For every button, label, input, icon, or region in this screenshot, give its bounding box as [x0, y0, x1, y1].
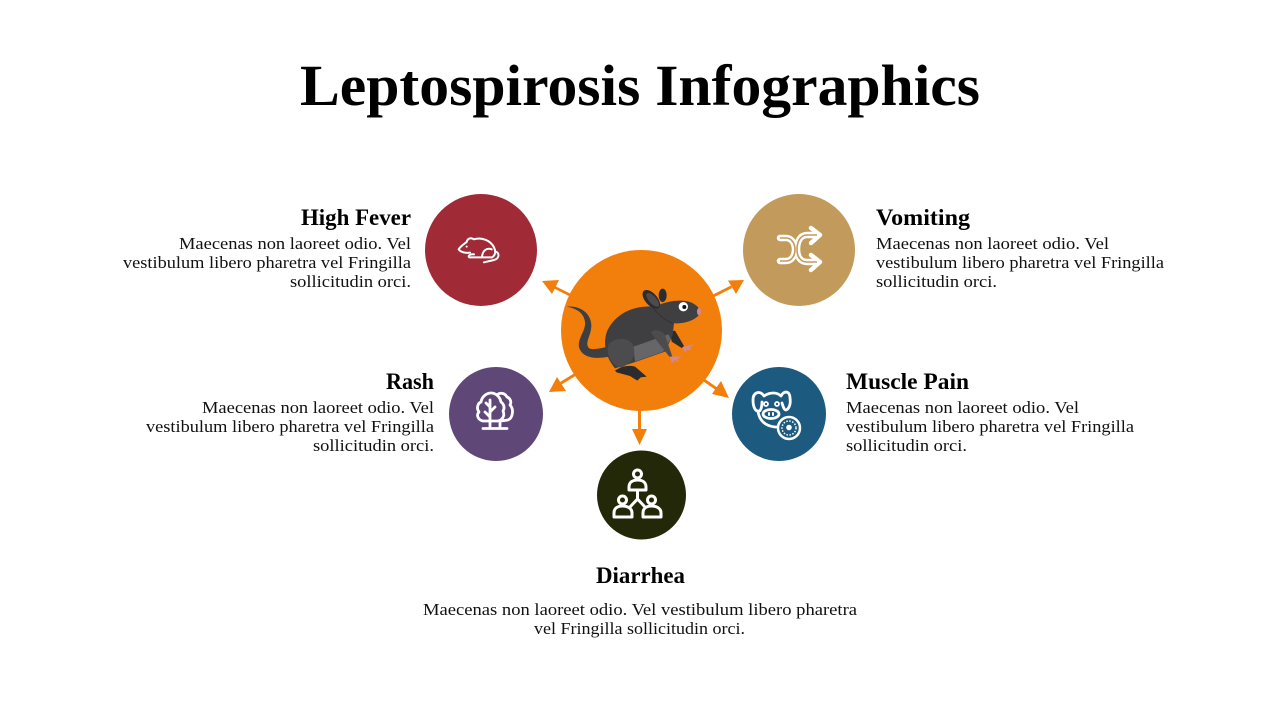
text block: rash — [146, 398, 434, 455]
panel: diarrhea — [423, 450, 857, 638]
text block: vomiting: sollicitudin orci. — [876, 272, 997, 291]
title: Leptospirosis Infographics — [300, 53, 980, 118]
icon: rat illustration — [567, 287, 701, 381]
heading: muscle pain: Muscle Pain — [846, 369, 969, 394]
heading: diarrhea: Diarrhea — [596, 563, 685, 588]
text block: diarrhea — [423, 600, 857, 638]
text block: rash: sollicitudin orci. — [313, 436, 434, 455]
text block: muscle pain — [846, 398, 1134, 455]
icon circle: tan with crossing arrows — [743, 194, 855, 306]
icon circle: dark olive with people network — [597, 450, 686, 540]
text block: vomiting: vestibulum libero pharetra vel Fringilla — [876, 253, 1164, 272]
panel: rash — [146, 367, 543, 461]
arrow: to muscle pain — [704, 379, 729, 398]
icon circle: red with mouse — [425, 194, 537, 306]
panel: high fever — [123, 194, 537, 306]
text block: high fever: vestibulum libero pharetra vel Fringilla — [123, 253, 411, 272]
heading: rash: Rash — [386, 369, 434, 394]
panel: vomiting — [743, 194, 1164, 306]
text block: muscle pain: vestibulum libero pharetra vel Fringilla — [846, 417, 1134, 436]
text block: muscle pain: Maecenas non laoreet odio. Vel — [846, 398, 1079, 417]
text block: high fever: sollicitudin orci. — [290, 272, 411, 291]
icon circle: blue with pig and virus — [732, 367, 826, 461]
panel: muscle pain — [732, 367, 1134, 461]
heading: high fever: High Fever — [301, 205, 411, 230]
arrow: to high fever — [542, 280, 571, 296]
text block: high fever: Maecenas non laoreet odio. Vel — [179, 234, 411, 253]
text block: muscle pain: sollicitudin orci. — [846, 436, 967, 455]
heading: vomiting: Vomiting — [876, 205, 971, 230]
central circle with rat — [561, 250, 722, 411]
text block: vomiting — [876, 234, 1164, 291]
text block: diarrhea: vel Fringilla sollicitudin orci. — [534, 619, 745, 638]
text block: high fever — [123, 234, 411, 291]
arrow: to rash — [549, 374, 576, 392]
icon circle: purple with trees — [449, 367, 543, 461]
text block: vomiting: Maecenas non laoreet odio. Vel — [876, 234, 1109, 253]
arrow: to vomiting — [713, 280, 744, 297]
arrows from the centre to each symptom — [542, 280, 744, 445]
arrow: to diarrhea — [632, 410, 647, 445]
text block: rash: Maecenas non laoreet odio. Vel — [202, 398, 434, 417]
text block: diarrhea: Maecenas non laoreet odio. Vel vestibulum libero pharetra — [423, 600, 857, 619]
text block: rash: vestibulum libero pharetra vel Fringilla — [146, 417, 434, 436]
